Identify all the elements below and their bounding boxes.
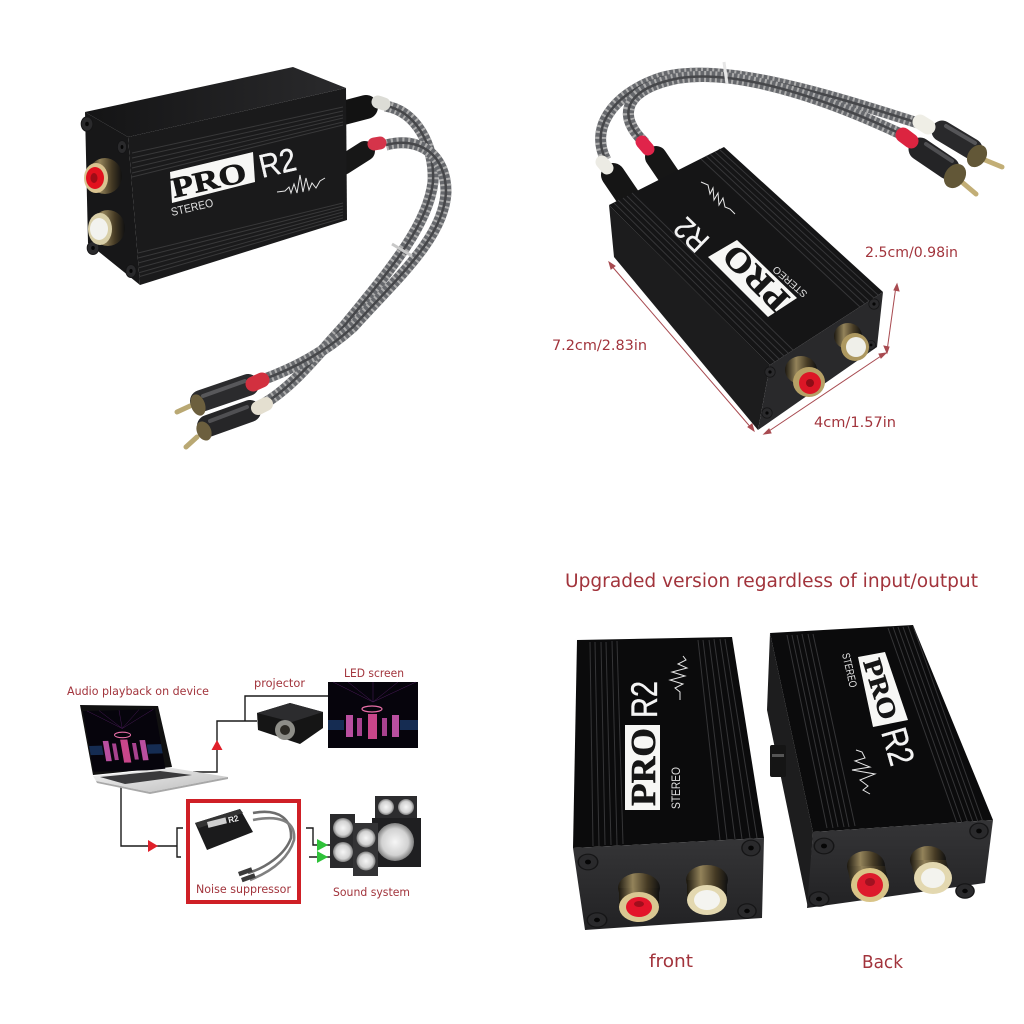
ridges	[787, 626, 983, 828]
heading: Upgraded version regardless of input/output	[565, 571, 978, 592]
device top face	[85, 67, 346, 137]
label: noise suppressor: Noise suppressor	[196, 882, 291, 896]
label: R2: R2	[873, 723, 923, 770]
RCA jack: white	[88, 210, 125, 246]
device: front view	[573, 637, 764, 930]
label: PRO: PRO	[168, 157, 250, 205]
label: PRO	[168, 152, 255, 205]
rear plugs	[602, 142, 675, 200]
dimension label: length: 7.2cm/2.83in	[552, 338, 647, 354]
cable: left channel	[601, 73, 918, 160]
caption: back: Back	[862, 952, 904, 973]
label: STEREO: STEREO	[170, 198, 215, 219]
end face screws	[761, 298, 880, 419]
device left side face	[609, 205, 770, 430]
waveform mark	[277, 175, 325, 193]
device long side	[128, 88, 347, 285]
device end face	[85, 112, 140, 285]
dimension arrow: height	[884, 284, 899, 353]
arrow: to suppressor	[148, 840, 158, 852]
label: projector: projector	[254, 676, 305, 690]
cable: white channel	[265, 106, 433, 403]
end face screws	[81, 116, 137, 278]
side ridges	[132, 107, 343, 277]
cable: red channel	[262, 143, 446, 380]
label: audio playback: Audio playback on device	[67, 684, 209, 698]
arrow: to projector	[212, 740, 222, 750]
panel: product photo with cable, top left	[81, 67, 446, 447]
connection lines	[121, 696, 330, 857]
RCA jack: red	[84, 158, 122, 194]
speakers	[330, 796, 421, 876]
label: PRO: PRO	[624, 728, 663, 806]
label: STEREO: STEREO	[839, 652, 859, 689]
arrow: to speaker lower	[317, 851, 328, 863]
label: R2: R2	[667, 210, 716, 259]
top ridges	[614, 149, 878, 362]
device top face	[609, 147, 883, 365]
device: back view	[767, 625, 993, 908]
panel: front and back comparison, bottom right	[565, 571, 993, 973]
RCA plug: front	[903, 135, 976, 194]
panel: connection diagram, bottom left	[67, 666, 421, 902]
mini device: R2	[227, 814, 240, 825]
label: R2: R2	[255, 140, 300, 185]
label: PRO: PRO	[857, 655, 903, 723]
screws	[578, 840, 761, 928]
screws	[808, 823, 989, 907]
arrow: to speaker upper	[317, 839, 328, 851]
label: sound system: Sound system	[333, 885, 410, 899]
label: PRO: PRO	[716, 237, 797, 318]
waveform mark	[852, 750, 875, 794]
laptop	[80, 705, 228, 794]
dimension label: height: 2.5cm/0.98in	[865, 245, 958, 261]
caption: front: front	[649, 951, 693, 972]
panel: dimensioned product photo, top right	[552, 62, 1002, 434]
device end face	[758, 292, 883, 430]
device rear plugs	[343, 102, 384, 165]
RCA jack: red	[618, 873, 660, 922]
RCA jack: white	[834, 323, 869, 361]
cable: right channel	[628, 76, 903, 143]
dimension label: width: 4cm/1.57in	[814, 415, 896, 431]
dimension arrow: length	[609, 262, 754, 431]
label: R2: R2	[624, 681, 665, 718]
RCA plug: white	[186, 404, 266, 447]
label: STEREO: STEREO	[669, 767, 683, 809]
cable tie	[392, 244, 412, 256]
cable tie	[724, 62, 727, 84]
label: STEREO: STEREO	[771, 263, 810, 299]
ridges	[590, 639, 757, 846]
noise suppressor box	[188, 801, 299, 902]
RCA jack: red	[847, 851, 889, 902]
RCA jack: red	[785, 356, 825, 397]
RCA plug: rear	[920, 122, 1002, 171]
projector	[257, 703, 323, 744]
LED screen	[328, 666, 418, 748]
RCA plug: red	[177, 380, 262, 418]
waveform mark	[670, 656, 687, 700]
dimension arrow: width	[764, 353, 886, 434]
waveform mark	[701, 182, 735, 214]
LED screen: LED screen	[344, 666, 404, 680]
RCA jack: white	[910, 846, 952, 894]
RCA jack: white	[686, 865, 728, 915]
